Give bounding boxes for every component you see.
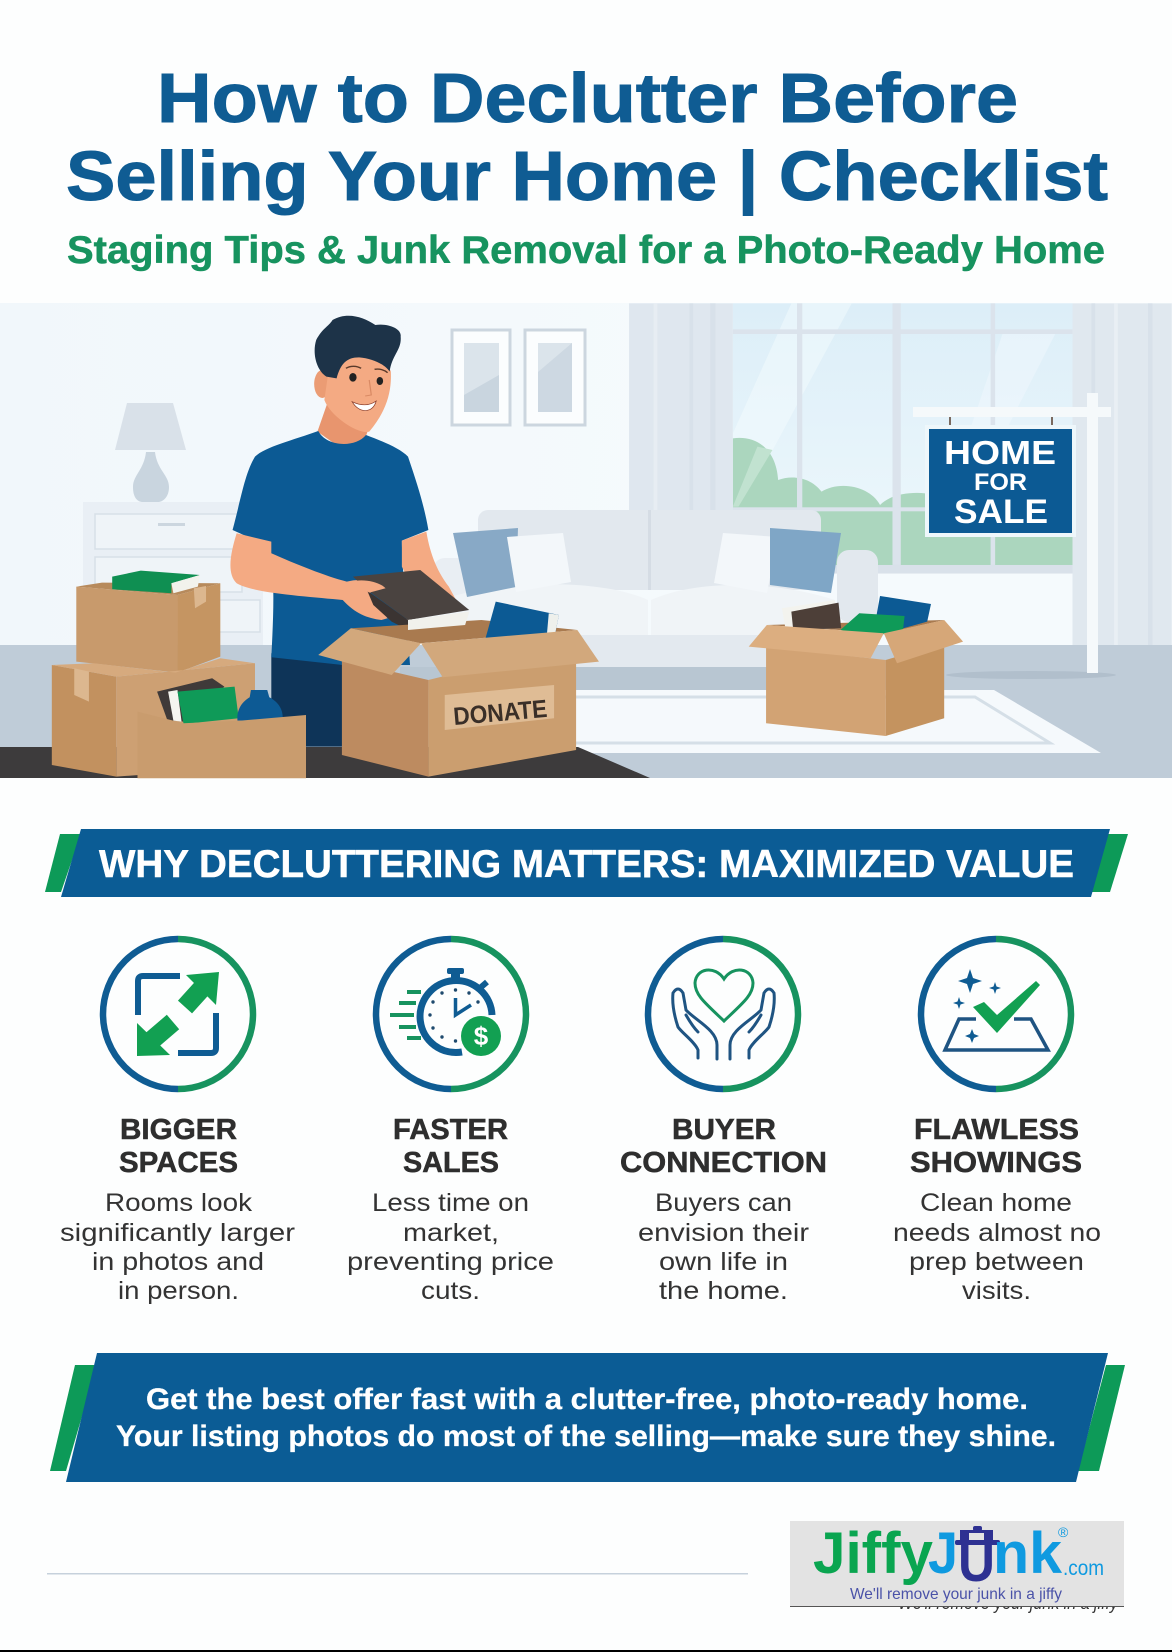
description: Clean home [920, 1189, 1072, 1217]
bottom black edge [0, 1650, 1172, 1652]
heading: FLAWLESS [914, 1114, 1079, 1146]
neck [317, 400, 369, 447]
column: faster sales [347, 939, 554, 1305]
heading [910, 1114, 1082, 1179]
home for sale sign: HOME [944, 434, 1056, 471]
facial features [346, 366, 388, 411]
section banner: why decluttering matters: WHY DECLUTTERING MATTERS: MAXIMIZED VALUE [99, 843, 1074, 886]
home for sale sign [925, 425, 1076, 537]
dark floor mat [0, 747, 650, 778]
dresser [83, 502, 263, 645]
title: How to Declutter Before [157, 59, 1018, 137]
description: Buyers can [655, 1189, 792, 1217]
ear [314, 370, 330, 398]
heading: FASTER [393, 1114, 508, 1146]
description: envision their [638, 1219, 809, 1247]
title [66, 59, 1108, 216]
right box with contents [749, 596, 963, 736]
logo: Jiffy Junk: .com [1063, 1557, 1104, 1580]
lamp [115, 403, 186, 502]
callout banner [50, 1353, 1125, 1482]
heading [620, 1114, 827, 1179]
description: prep between [909, 1248, 1084, 1276]
description [347, 1189, 554, 1305]
icon: stopwatch with dollar: $ [474, 1021, 489, 1051]
logo: Jiffy Junk: nk [993, 1521, 1063, 1586]
sofa [433, 510, 878, 667]
description: in photos and [92, 1248, 264, 1276]
section banner: why decluttering matters [45, 829, 1128, 897]
heading: BUYER [672, 1114, 776, 1146]
icon: stopwatch with dollar [376, 939, 526, 1089]
window and curtains [629, 303, 1172, 659]
description: market, [403, 1219, 499, 1247]
home for sale sign: SALE [954, 493, 1048, 531]
description: Rooms look [105, 1189, 253, 1217]
heading: SPACES [119, 1147, 238, 1179]
heading [119, 1114, 238, 1179]
wall frames [452, 330, 585, 425]
home for sale sign: FOR [974, 469, 1027, 496]
stacked boxes left [52, 571, 306, 778]
logo: Jiffy Junk: U [958, 1529, 995, 1594]
top box [76, 583, 220, 595]
title: Selling Your Home | Checklist [66, 137, 1108, 216]
logo: Jiffy Junk: We'll remove your junk in a jiffy [850, 1586, 1062, 1603]
description [893, 1189, 1101, 1305]
logo: Jiffy Junk: ® [1058, 1524, 1069, 1540]
heading: SALES [403, 1147, 499, 1179]
floor [0, 645, 1172, 778]
heading: CONNECTION [620, 1147, 827, 1179]
donate box [318, 602, 599, 777]
donate label text: DONATE [452, 695, 548, 731]
front small box [137, 712, 306, 778]
logo: Jiffy Junk: We'll remove your junk in a jiffy [898, 1593, 1119, 1613]
description: the home. [659, 1277, 788, 1305]
hero illustration: room with man packing boxes [0, 303, 1172, 778]
middle box [52, 665, 116, 777]
footer rule [47, 1573, 748, 1574]
sofa pillows [453, 528, 841, 597]
description: own life in [659, 1248, 788, 1276]
green book [112, 571, 200, 593]
subtitle: Staging Tips & Junk Removal for a Photo-Ready Home [67, 229, 1105, 272]
logo: Jiffy Junk: Jiffy [813, 1521, 933, 1586]
description [60, 1189, 295, 1305]
heading [393, 1114, 508, 1179]
icon: check mark and sparkles [921, 939, 1071, 1089]
description: preventing price [347, 1248, 554, 1276]
callout banner: Get the best offer fast with a clutter-free, photo-ready home. [146, 1383, 1028, 1416]
heading: BIGGER [120, 1114, 237, 1146]
column: bigger spaces [60, 939, 295, 1305]
man [230, 316, 457, 747]
icon: expanding arrows [103, 939, 253, 1089]
icon: hands holding heart [648, 939, 798, 1089]
description: in person. [118, 1277, 239, 1305]
description [638, 1189, 809, 1305]
face [324, 350, 391, 432]
trousers [271, 653, 343, 747]
box contents [157, 678, 224, 722]
description: needs almost no [893, 1219, 1101, 1247]
description: cuts. [421, 1277, 480, 1305]
arms [230, 533, 388, 620]
description: Less time on [372, 1189, 529, 1217]
callout banner: Your listing photos do most of the selling—make sure they shine. [116, 1420, 1056, 1453]
logo: Jiffy Junk [790, 1521, 1124, 1613]
t-shirt [233, 431, 428, 665]
for sale sign post [913, 393, 1111, 673]
description: visits. [962, 1277, 1031, 1305]
book held by man [351, 570, 469, 630]
logo: Jiffy Junk: J [928, 1521, 958, 1586]
column: buyer connection [620, 939, 827, 1305]
heading: SHOWINGS [910, 1147, 1082, 1179]
room background: wall [0, 303, 1172, 778]
hair [315, 316, 401, 378]
column: flawless showings [893, 939, 1101, 1305]
rug [500, 690, 1101, 753]
description: significantly larger [60, 1219, 295, 1247]
